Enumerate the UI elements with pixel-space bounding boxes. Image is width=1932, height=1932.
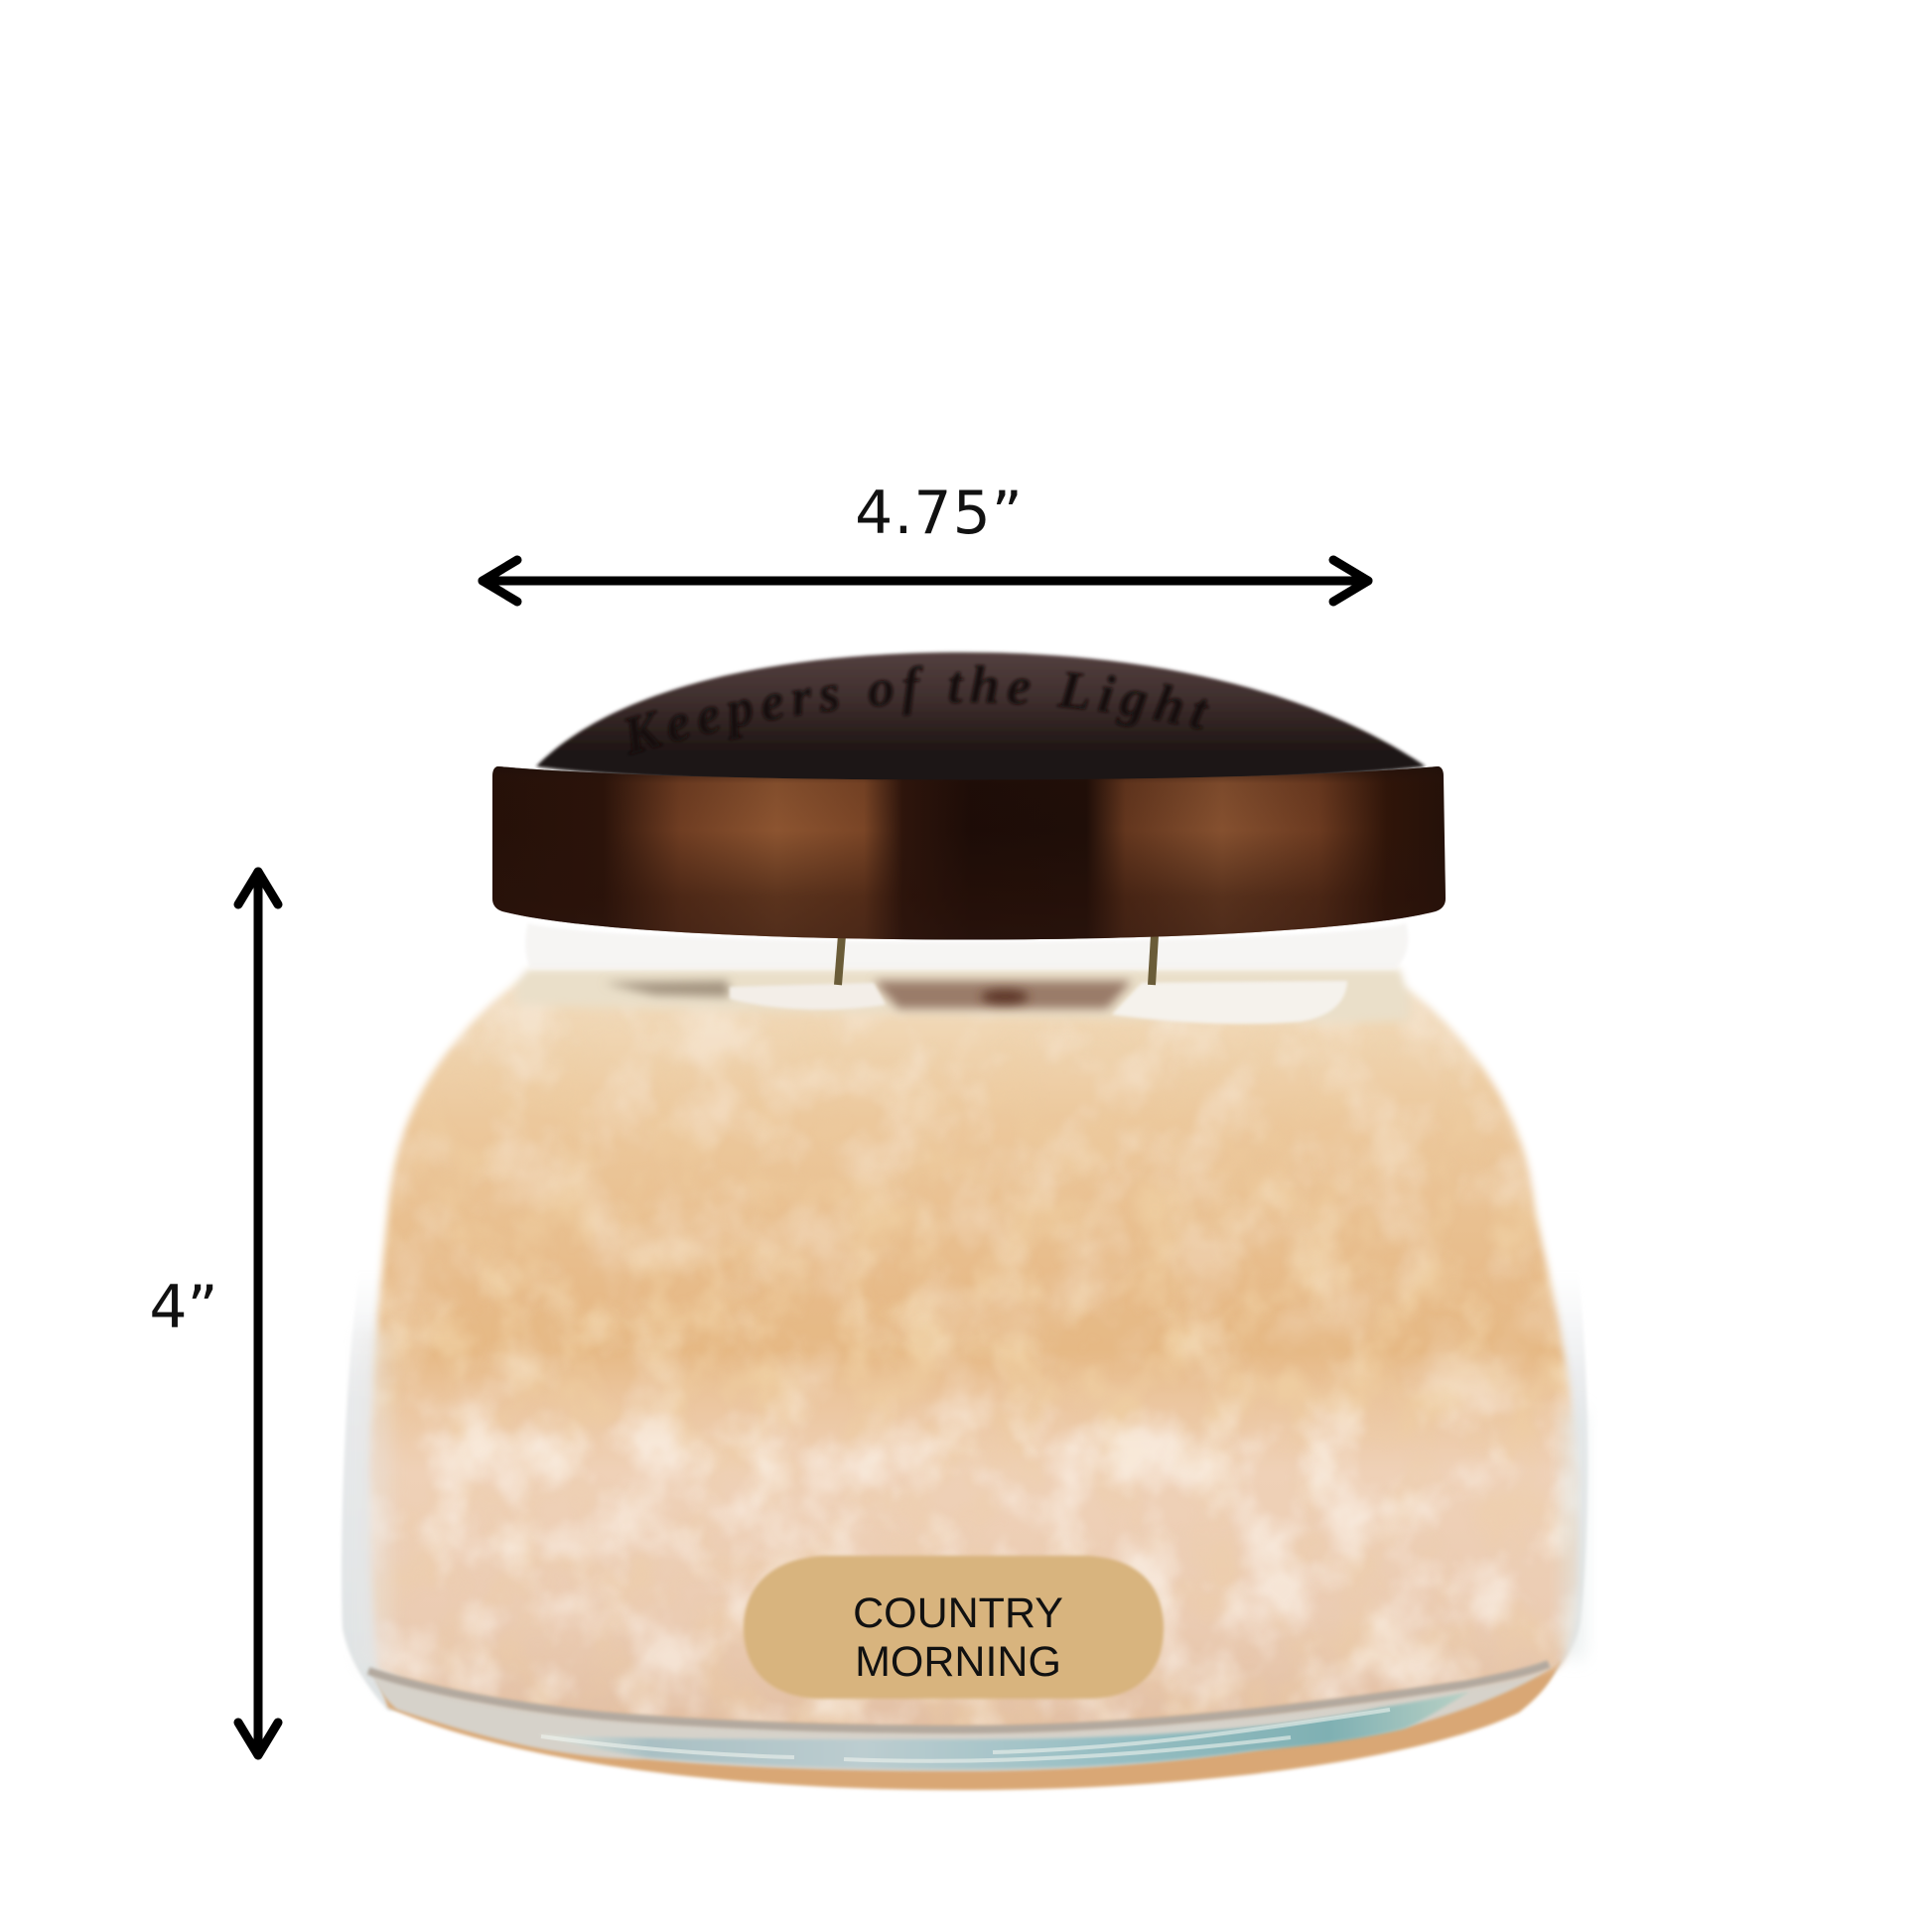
wax body (338, 953, 1598, 1747)
lid (492, 649, 1446, 939)
side glass veil left (359, 1330, 391, 1668)
wax base colour (338, 953, 1598, 1747)
wick right (1152, 935, 1155, 985)
wax surface band (520, 971, 1407, 1024)
width label: 4.75” (855, 479, 1024, 548)
width arrow (483, 560, 1368, 602)
side glass veil right (1563, 1410, 1585, 1658)
label sticker (744, 1556, 1164, 1699)
wick stain (981, 990, 1029, 1004)
candle jar (341, 649, 1589, 1793)
melt pool left (730, 983, 886, 1010)
darker mottling (377, 1184, 1566, 1394)
height label: 4” (149, 1273, 218, 1342)
lid dome (536, 652, 1426, 784)
melt pool right (1112, 981, 1347, 1024)
glass shoulder (525, 923, 1408, 969)
iridescent glass lens (538, 1692, 1469, 1769)
wick left (838, 935, 842, 985)
dark wax shadow left (604, 981, 730, 997)
label text: COUNTRY (853, 1589, 1063, 1637)
peach jar base (377, 1660, 1561, 1790)
glass jar side edges (342, 1271, 1587, 1711)
lid copper rim (486, 764, 1454, 953)
pale mottling (369, 998, 1580, 1725)
dark wax shadow centre (874, 981, 1132, 1009)
embossed lid text: Keepers of the Light (624, 663, 1209, 755)
infographic canvas (152, 489, 1589, 1793)
clear glass foot (369, 1660, 1561, 1771)
lens highlights (541, 1710, 1390, 1761)
height arrow (238, 872, 278, 1755)
glass base rim line (368, 1664, 1549, 1729)
label text: MORNING (855, 1638, 1061, 1686)
scent label (744, 1556, 1164, 1699)
